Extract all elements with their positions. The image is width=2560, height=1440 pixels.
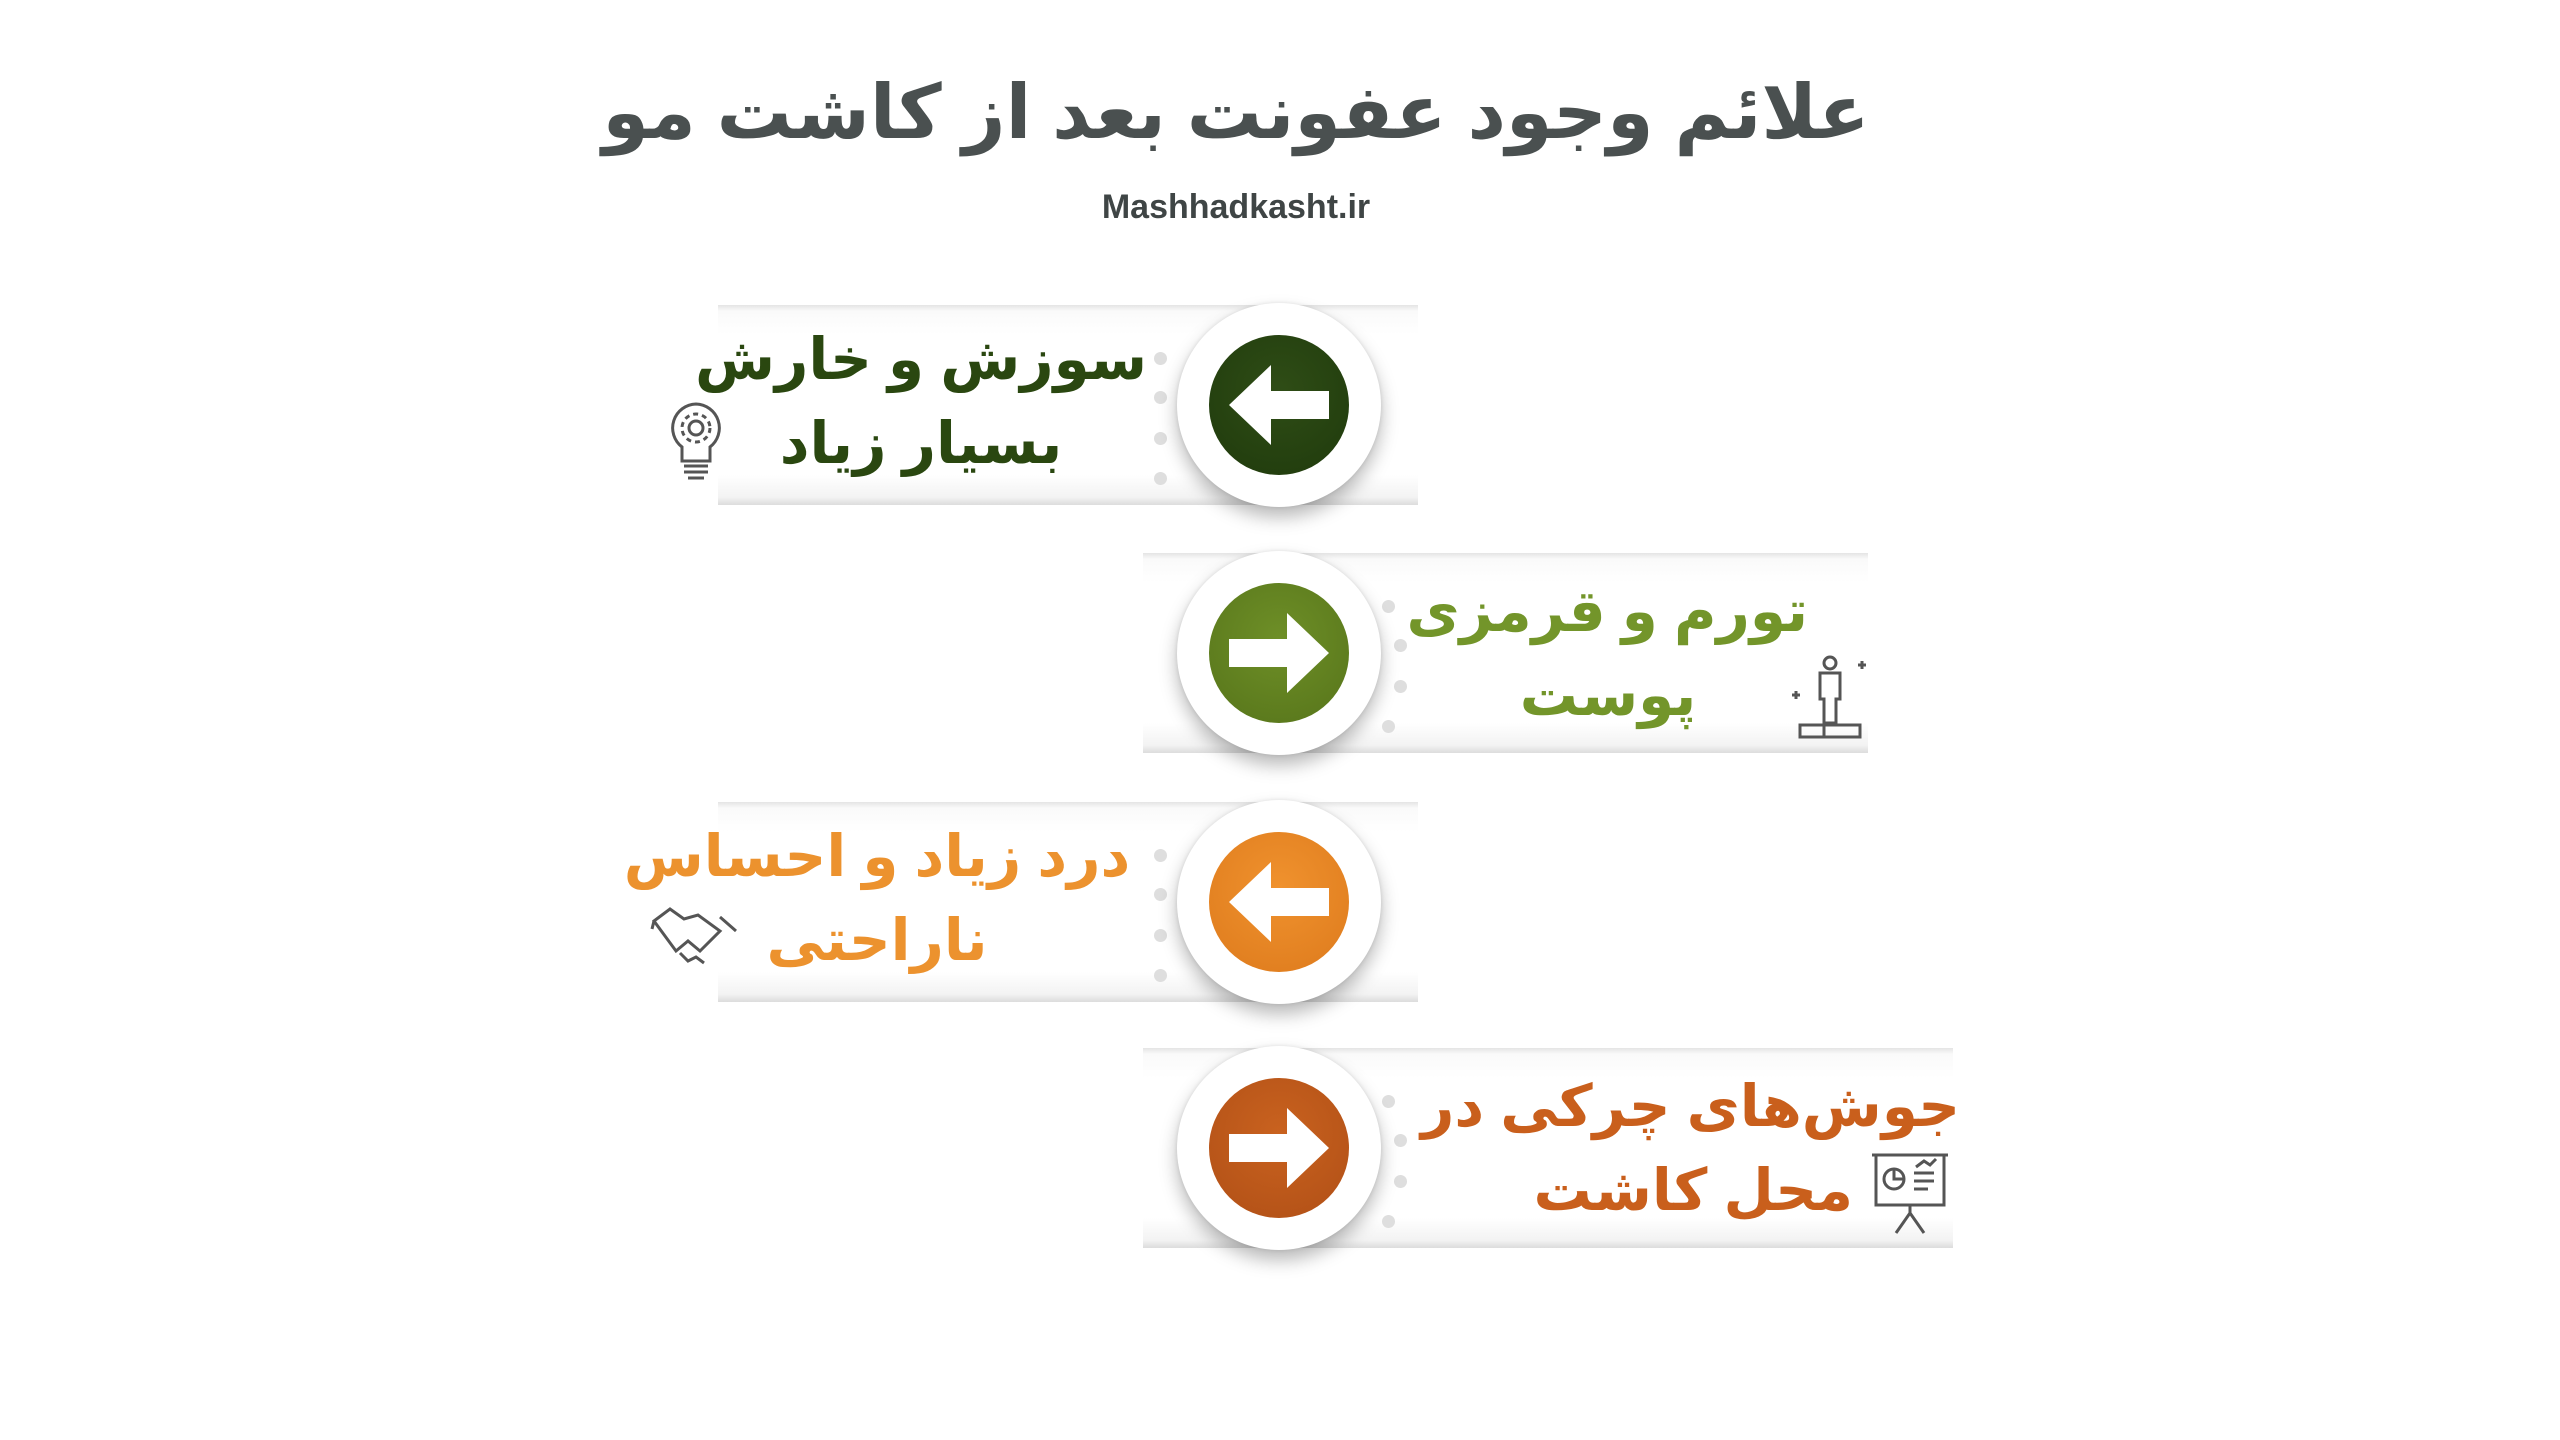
text 3: درد زیاد و احساس xyxy=(624,824,1130,889)
text 3 xyxy=(624,824,1130,974)
text 1 xyxy=(695,327,1147,477)
icon: presentation board xyxy=(1872,1154,1948,1234)
text 1: سوزش و خارش xyxy=(695,327,1147,392)
text 4: محل کاشت xyxy=(1533,1158,1853,1223)
text 2 xyxy=(1406,579,1808,730)
arrow circle 2 xyxy=(1177,551,1381,755)
text 2: پوست xyxy=(1520,663,1696,728)
text 2: تورم و قرمزی xyxy=(1406,579,1808,644)
row 2 xyxy=(1143,549,1868,775)
row 4 xyxy=(1143,1044,1960,1270)
icon: bulb gear xyxy=(671,402,721,480)
text 1: بسیار زیاد xyxy=(780,411,1062,476)
subtitle: Mashhadkasht.ir xyxy=(1102,188,1370,226)
icon: handshake xyxy=(650,907,737,964)
text 4 xyxy=(1418,1074,1960,1223)
arrow circle 4 xyxy=(1177,1046,1381,1250)
icon: person podium xyxy=(1792,656,1866,738)
arrow circle 1 xyxy=(1177,303,1381,507)
text 4: جوش‌های چرکی در xyxy=(1421,1074,1960,1139)
text 3: ناراحتی xyxy=(766,908,987,973)
row 1 xyxy=(671,301,1418,527)
row 3 xyxy=(624,798,1418,1024)
title: علائم وجود عفونت بعد از کاشت مو xyxy=(602,70,1870,154)
arrow circle 3 xyxy=(1177,800,1381,1004)
